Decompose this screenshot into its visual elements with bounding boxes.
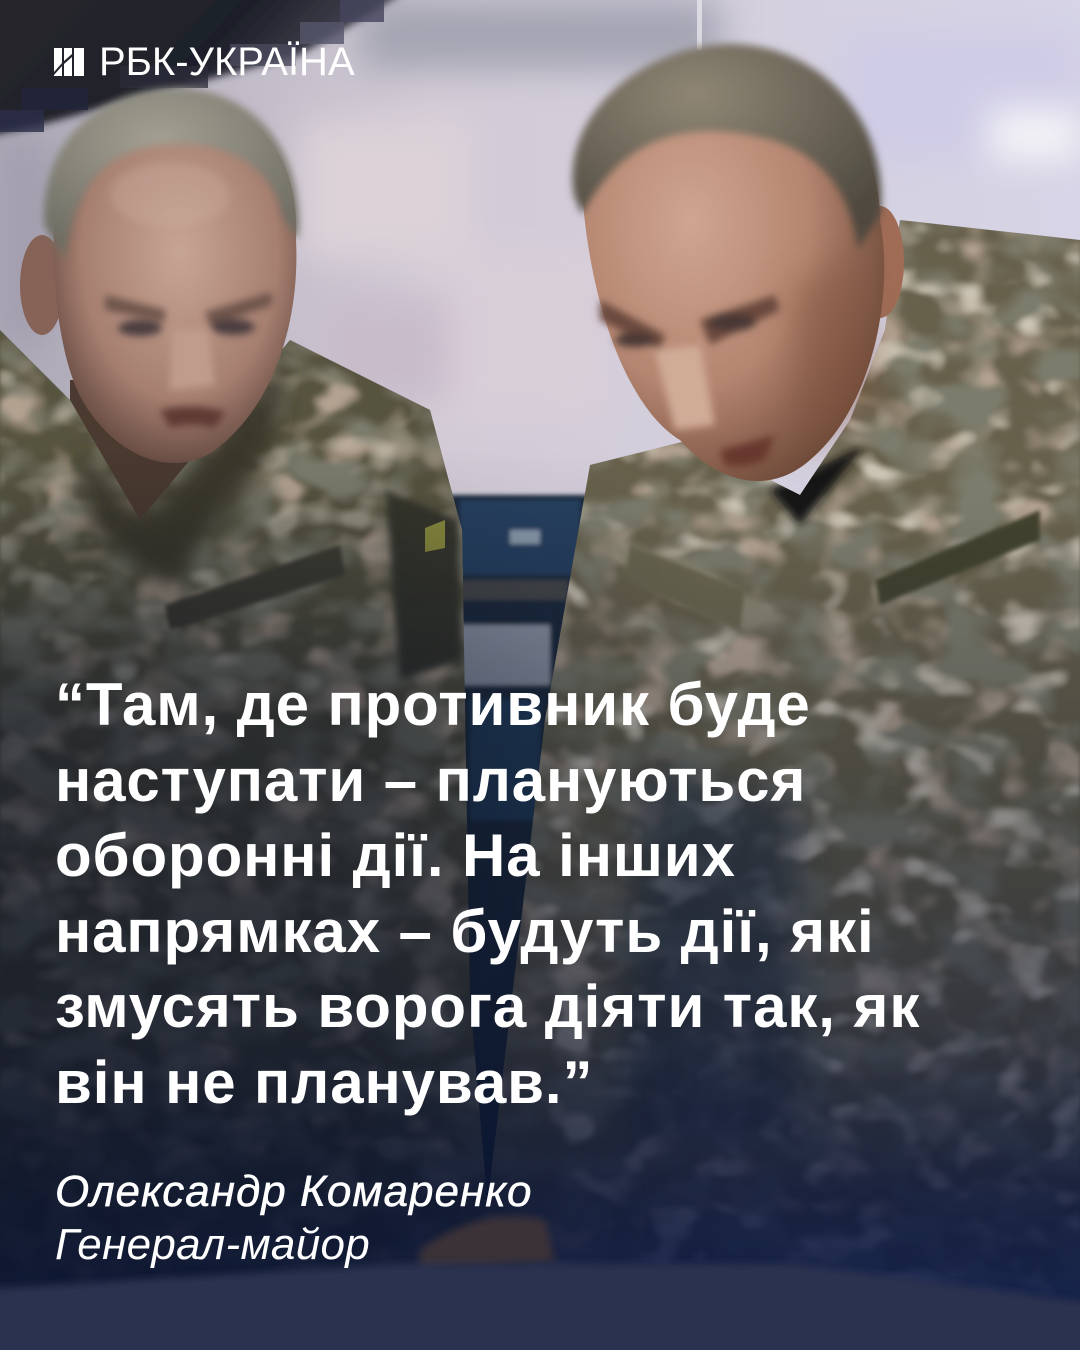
left man: head	[54, 100, 296, 463]
quote text: наступати – плануються	[55, 747, 806, 814]
right man	[450, 44, 1080, 1350]
logo: РБК-Україна	[54, 40, 355, 84]
icon: logo mark	[54, 48, 84, 76]
quote text	[55, 671, 920, 1116]
logo text: РБК-УКРАЇНА	[99, 40, 355, 84]
author attribution: Олександр Комаренко	[55, 1167, 532, 1216]
quote text: напрямках – будуть дії, які	[55, 898, 875, 965]
left man: neck	[70, 380, 290, 540]
bottom dark navy gradient	[0, 500, 1080, 1350]
author attribution	[55, 1167, 532, 1269]
hand on the map	[420, 1216, 555, 1270]
map table edge	[0, 1264, 1080, 1350]
right man: ear	[856, 206, 904, 318]
quote text: змусять ворога діяти так, як	[55, 973, 920, 1040]
quote text: він не планував.”	[55, 1049, 593, 1116]
author attribution: Генерал-майор	[55, 1220, 370, 1269]
screens between figures	[430, 495, 600, 1350]
vertical wall seam	[697, 0, 702, 50]
dark top-left corner with pixelated edge	[0, 0, 440, 140]
quote text: оборонні дії. На інших	[55, 822, 736, 889]
right man: head	[582, 65, 884, 481]
quote text: “Там, де противник буде	[55, 671, 811, 738]
left man: ear	[20, 235, 64, 335]
left man	[0, 83, 487, 1276]
